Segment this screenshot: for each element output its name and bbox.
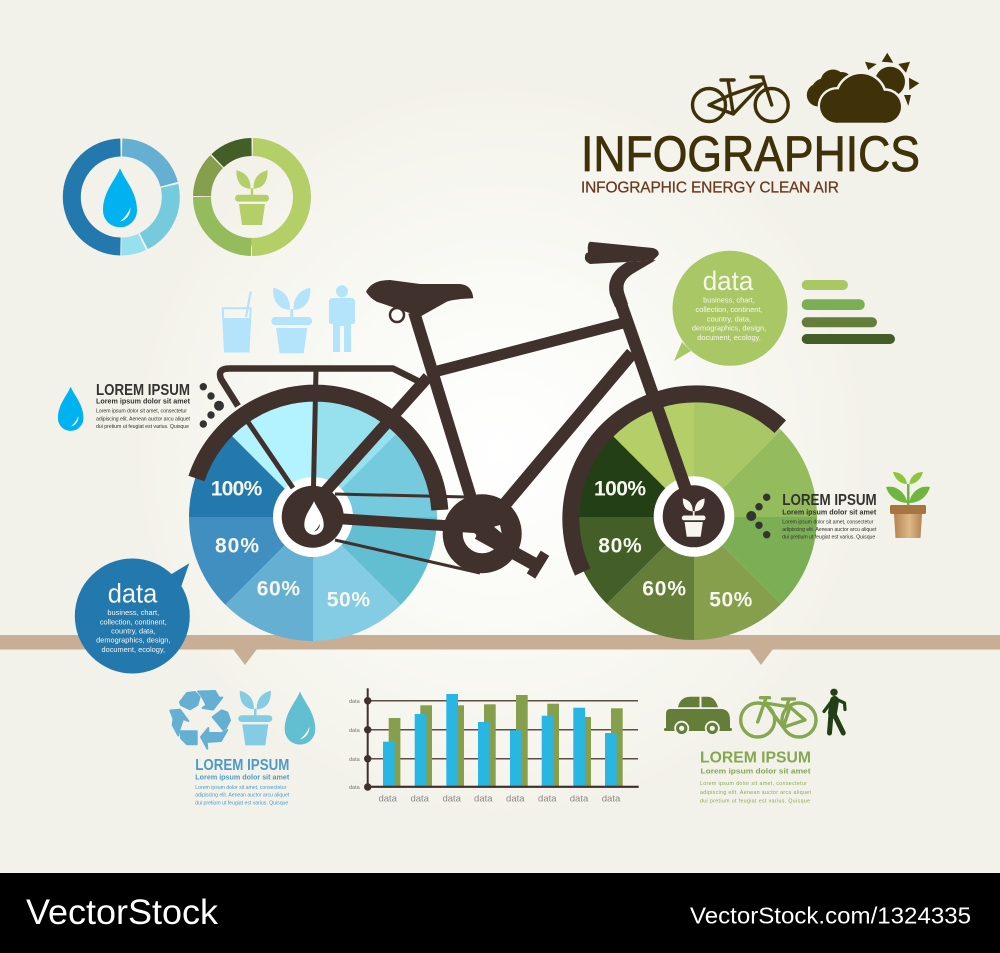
speech bubble: blue data: business, chart, xyxy=(107,608,159,617)
speech bubble: green data: country, data, xyxy=(707,314,751,323)
legend text: LOREM IPSUM xyxy=(96,382,190,399)
text block: green lorem ipsum: LOREM IPSUM xyxy=(700,749,811,766)
text block: blue lorem ipsum: Lorem ipsum dolor sit amet xyxy=(195,773,290,782)
text block: green lorem ipsum xyxy=(700,749,812,805)
speech bubble: green data: data xyxy=(703,266,754,296)
x axis labels: data xyxy=(506,794,525,805)
chart axes xyxy=(364,688,639,791)
icon: teal drop xyxy=(285,691,315,745)
speech bubble: blue data: demographics, design, xyxy=(96,636,170,645)
legend text: dui pretium ut feugiat est varius. Quisque xyxy=(96,424,189,430)
header logo icon: sun and clouds xyxy=(807,53,919,125)
icon: recycle xyxy=(170,691,230,749)
speech bubble: blue data: data xyxy=(108,578,158,608)
speech bubble: blue data: document, ecology, xyxy=(102,645,165,654)
text block: green lorem ipsum: dui pretium ut feugiat est varius. Quisque xyxy=(700,799,810,805)
y axis labels: data xyxy=(349,785,361,791)
x axis labels: data xyxy=(570,794,589,805)
icon: potted sprout xyxy=(886,472,930,538)
icon: blue plant xyxy=(238,691,272,745)
header logo icon: bicycle xyxy=(692,77,788,122)
front wheel percent labels: 100% xyxy=(594,478,646,501)
text block: blue lorem ipsum: Lorem ipsum dolor sit amet, consectetur xyxy=(195,785,287,791)
title: INFOGRAPHICS xyxy=(581,126,920,182)
legend text: dui pretium ut feugiat est varius. Quisque xyxy=(782,535,875,541)
subtitle: INFOGRAPHIC ENERGY CLEAN AIR xyxy=(581,180,839,197)
y axis labels: data xyxy=(349,699,361,705)
y axis labels xyxy=(349,699,361,791)
x axis labels: data xyxy=(602,794,621,805)
donut: plant xyxy=(202,147,302,247)
rear wheel percent labels: 100% xyxy=(211,478,263,501)
rear hub xyxy=(282,486,344,548)
text block: blue lorem ipsum: LOREM IPSUM xyxy=(195,757,289,774)
mudguards xyxy=(196,393,780,572)
x axis labels xyxy=(378,794,621,805)
chainring and crank xyxy=(453,504,545,576)
speech bubble: blue data: collection, continent, xyxy=(100,617,167,626)
legend text: adipiscing elit. Aenean auctor arcu aliquet xyxy=(782,527,877,533)
front cloud xyxy=(818,72,904,125)
legend text xyxy=(96,382,191,430)
rear wheel percent labels xyxy=(211,478,370,612)
icon: water drop xyxy=(103,168,137,227)
rear rack xyxy=(220,368,420,488)
rear wheel percent labels: 80% xyxy=(215,535,259,558)
icon: glass xyxy=(223,292,251,352)
bar chart xyxy=(349,688,639,805)
x axis labels: data xyxy=(410,794,430,805)
icon: green bicycle xyxy=(741,698,816,737)
speech bubble: green data: demographics, design, xyxy=(692,324,766,333)
y axis labels: data xyxy=(349,757,361,763)
speech bubble: green data xyxy=(672,251,788,366)
text block: blue lorem ipsum xyxy=(195,757,290,806)
footer brand: VectorStock xyxy=(26,893,219,932)
icon: plant xyxy=(271,288,312,353)
rear wheel percent labels: 60% xyxy=(257,578,300,601)
frame tubes xyxy=(313,312,632,573)
saddle xyxy=(366,280,473,322)
donut: water xyxy=(72,148,171,246)
horizontal bars xyxy=(802,280,895,344)
icon: walking person xyxy=(824,689,845,733)
legend text: Lorem ipsum dolor sit amet xyxy=(782,507,877,516)
green bars xyxy=(389,695,623,786)
text block: blue lorem ipsum: dui pretium ut feugiat est varius. Quisque xyxy=(195,800,288,806)
legend text: adipiscing elit. Aenean auctor arcu aliquet xyxy=(96,416,191,422)
speech bubble: green data: collection, continent, xyxy=(696,305,762,314)
text block: green lorem ipsum: adipiscing elit. Aenean auctor arcu aliquet xyxy=(700,790,812,796)
rear wheel pie xyxy=(189,393,437,641)
front wheel percent labels: 80% xyxy=(598,535,642,558)
icon: person xyxy=(329,285,355,352)
text block: green lorem ipsum: Lorem ipsum dolor sit amet, consectetur xyxy=(700,781,807,787)
speech bubble: blue data: country, data, xyxy=(111,626,155,635)
icon: drop xyxy=(58,387,83,431)
connector dots xyxy=(200,383,224,428)
legend text: Lorem ipsum dolor sit amet, consectetur xyxy=(782,519,874,525)
front hub xyxy=(663,485,725,547)
text block: blue lorem ipsum: adipiscing elit. Aenean auctor arcu aliquet xyxy=(195,793,290,799)
blue bars xyxy=(383,694,617,786)
front wheel pie xyxy=(571,394,817,640)
rear wheel percent labels: 50% xyxy=(327,589,370,612)
front wheel percent labels: 60% xyxy=(642,578,686,601)
speech bubble: blue data xyxy=(75,558,190,674)
icon row: glass, plant, person xyxy=(223,285,355,353)
front wheel percent labels: 50% xyxy=(709,589,753,612)
x axis labels: data xyxy=(442,794,462,805)
speech bubble: green data: document, ecology, xyxy=(697,333,761,342)
x axis labels: data xyxy=(538,794,557,805)
footer bar xyxy=(0,873,1000,953)
bicycle silhouette xyxy=(196,242,780,576)
speech bubble: green data: business, chart, xyxy=(703,296,755,305)
y axis labels: data xyxy=(349,728,361,734)
legend text: LOREM IPSUM xyxy=(782,492,877,509)
legend text: Lorem ipsum dolor sit amet, consectetur xyxy=(96,409,187,415)
footer url: VectorStock.com/1324335 xyxy=(690,902,971,928)
legend: right lorem ipsum xyxy=(746,472,930,541)
legend text: Lorem ipsum dolor sit amet xyxy=(96,397,190,406)
x axis labels: data xyxy=(378,794,398,805)
ground strip xyxy=(0,635,1000,665)
fork and handlebar xyxy=(585,242,686,490)
text block: green lorem ipsum: Lorem ipsum dolor sit amet xyxy=(700,766,811,775)
icon: car xyxy=(664,697,732,736)
icon: plant pot xyxy=(235,170,269,225)
connector dots xyxy=(746,494,770,538)
front wheel percent labels xyxy=(594,478,753,612)
legend: left lorem ipsum xyxy=(58,382,224,431)
x axis labels: data xyxy=(474,794,493,805)
legend text xyxy=(782,492,877,541)
